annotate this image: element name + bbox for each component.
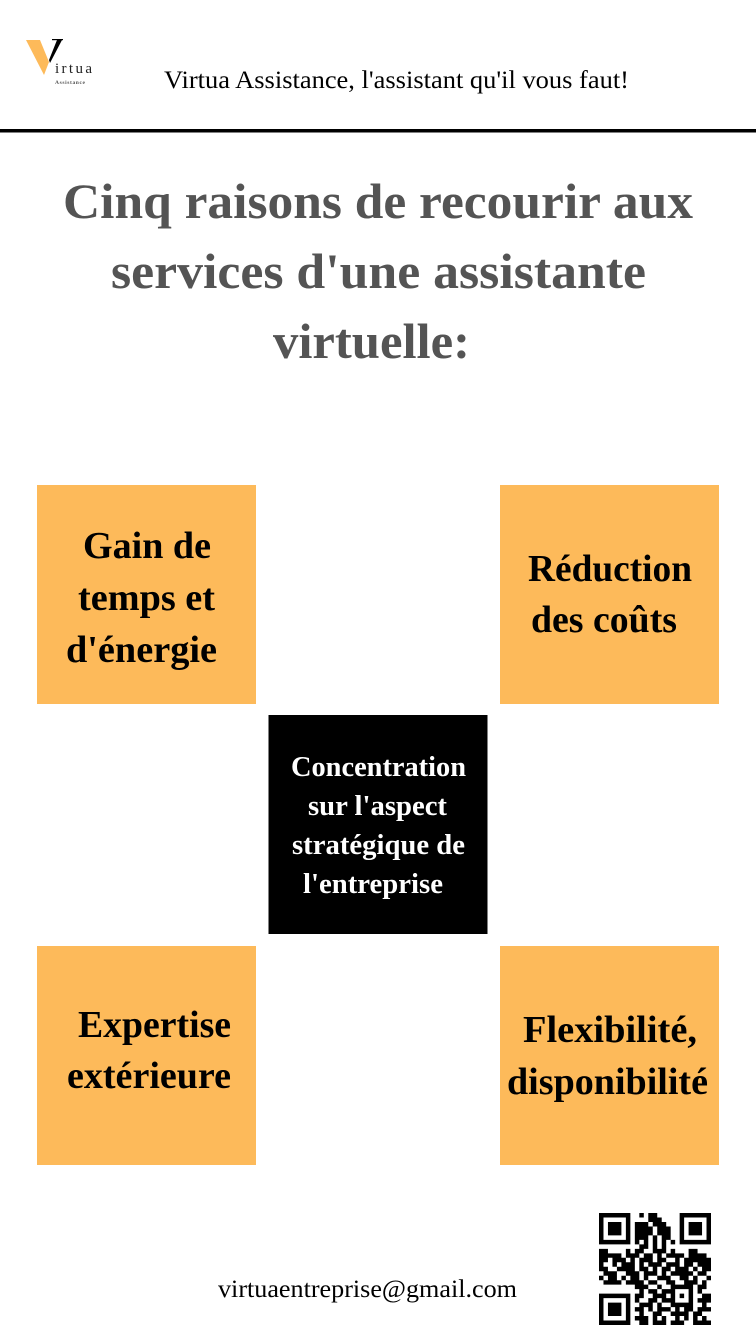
title: virtuelle: bbox=[273, 313, 470, 369]
panel: concentration: stratégique de bbox=[292, 830, 465, 861]
panel: concentration bbox=[268, 715, 488, 934]
contact email: virtuaentreprise@gmail.com bbox=[218, 1276, 518, 1303]
panel: gain de temps bbox=[37, 485, 256, 704]
panel: expertise exterieure bbox=[37, 946, 256, 1165]
panel: reduction des couts: Réduction bbox=[528, 548, 692, 590]
title: Cinq raisons de recourir aux bbox=[63, 173, 693, 229]
panel: flexibilite disponibilite: disponibilité bbox=[507, 1061, 708, 1103]
panel: flexibilite disponibilite: Flexibilité, bbox=[523, 1009, 697, 1051]
header logo: irtua bbox=[55, 61, 92, 77]
panel: gain de temps: Gain de bbox=[83, 525, 211, 567]
title: services d'une assistante bbox=[111, 243, 646, 299]
panel: expertise exterieure: Expertise bbox=[78, 1004, 231, 1046]
title bbox=[63, 173, 693, 369]
panel: concentration: Concentration bbox=[291, 752, 466, 783]
panel: gain de temps: d'énergie bbox=[66, 629, 217, 671]
panel: gain de temps: temps et bbox=[78, 577, 215, 619]
panel: flexibilite disponibilite bbox=[500, 946, 719, 1165]
panel: expertise exterieure: extérieure bbox=[67, 1055, 231, 1097]
header tagline: Virtua Assistance, l'assistant qu'il vous faut! bbox=[164, 67, 629, 94]
panel: concentration: sur l'aspect bbox=[308, 791, 448, 822]
QR code bbox=[599, 1213, 711, 1325]
panel: concentration: l'entreprise bbox=[303, 869, 443, 900]
panel: reduction des couts: des coûts bbox=[531, 599, 677, 641]
panel: reduction des couts bbox=[500, 485, 719, 704]
header logo: Assistance bbox=[55, 80, 86, 86]
header logo bbox=[26, 39, 92, 86]
